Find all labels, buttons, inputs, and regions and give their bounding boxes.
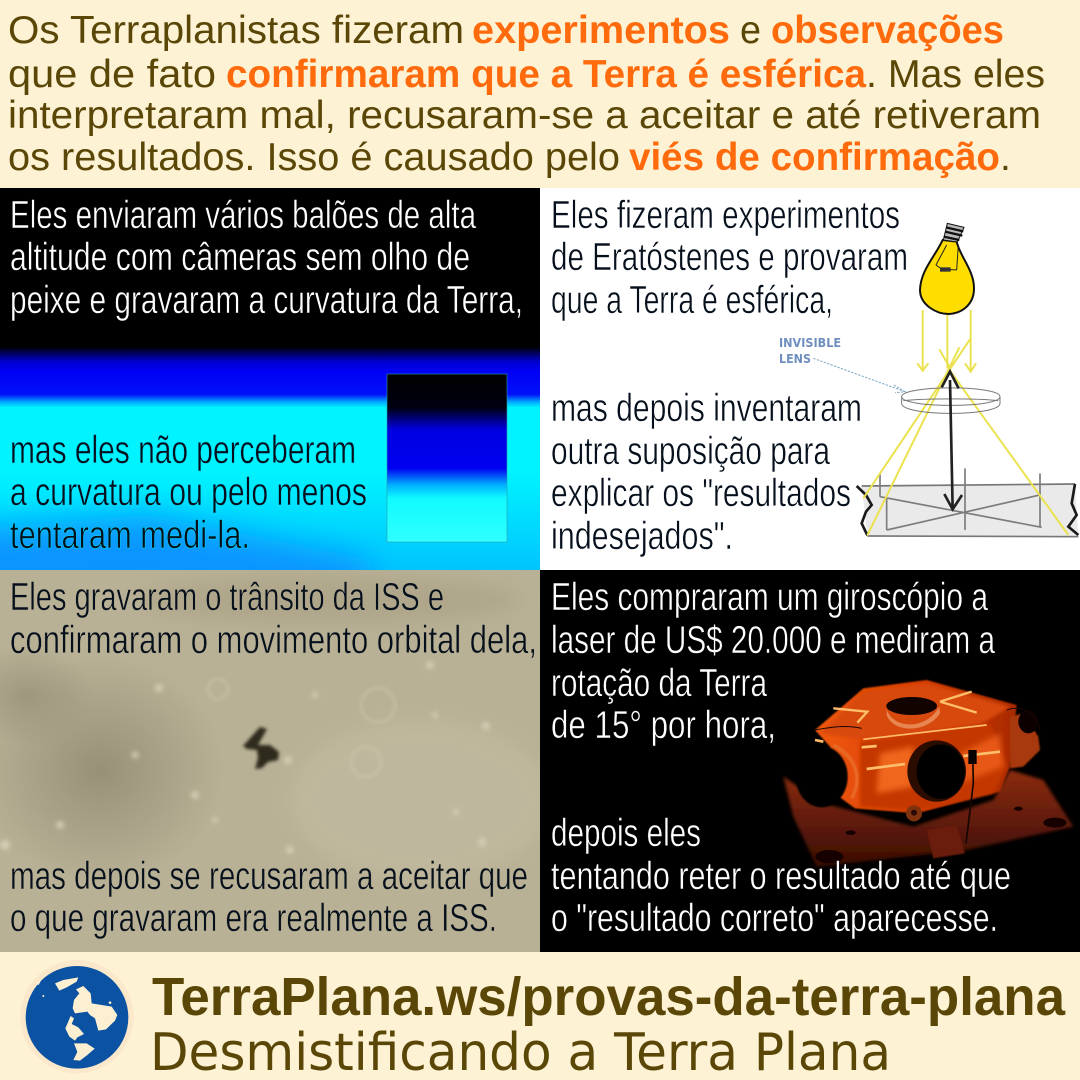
lens [902, 388, 1000, 413]
text: balloon claim: peixe e gravaram a curvatura da Terra, [10, 279, 523, 322]
heading: main statement: observações [771, 9, 1004, 52]
wires [966, 752, 973, 843]
black arrow [942, 372, 962, 509]
text: ISS rebuttal: mas depois se recusaram a aceitar que [10, 855, 528, 898]
text: Eratosthenes claim: de Eratóstenes e provaram [551, 236, 908, 279]
photo: ring laser gyroscope [783, 680, 1073, 867]
text: gyroscope claim [551, 576, 995, 747]
heading: main statement: os resultados. Isso é causado pelo [8, 136, 620, 179]
heading: main statement: e [740, 9, 761, 52]
text: Eratosthenes rebuttal: outra suposição para [551, 430, 830, 473]
text: balloon rebuttal: mas eles não perceberam [10, 429, 356, 472]
heading: main statement: . [1000, 136, 1011, 179]
icon: flat earth globe [20, 960, 134, 1073]
heading: main statement: . Mas eles [866, 53, 1045, 96]
base plate [783, 770, 1073, 867]
text: balloon claim: Eles enviaram vários balões de alta [10, 194, 476, 237]
text: balloon claim [10, 194, 523, 322]
heading: main statement: que de fato [8, 53, 216, 96]
panel: balloon curvature [0, 188, 540, 570]
ground plane [862, 484, 1078, 537]
illustration: bulb, invisible lens and ground [813, 223, 1078, 537]
text: Eratosthenes rebuttal [551, 387, 862, 558]
inset: zoomed horizon crop [387, 374, 507, 542]
text: balloon rebuttal [10, 429, 367, 557]
text: balloon rebuttal: a curvatura ou pelo menos [10, 471, 367, 514]
heading: main statement: interpretaram mal, recusaram-se a aceitar e até retiveram [8, 94, 1041, 137]
text: ISS rebuttal: o que gravaram era realmente a ISS. [10, 897, 497, 940]
text: ISS rebuttal [10, 855, 528, 940]
heading: main statement [8, 9, 1045, 179]
lens label leader [813, 358, 905, 393]
text: balloon claim: altitude com câmeras sem olho de [10, 236, 470, 279]
panel: laser gyroscope [540, 570, 1080, 952]
heading: main statement: confirmaram que a Terra é esférica [226, 53, 866, 96]
ports [1010, 713, 1040, 768]
text: ISS claim: confirmaram o movimento orbital dela, [10, 619, 537, 662]
text: gyroscope claim: de 15° por hora, [551, 704, 776, 747]
text: Eratosthenes rebuttal: indesejados". [551, 515, 733, 558]
text: ISS claim: Eles gravaram o trânsito da ISS e [10, 576, 444, 619]
text: Eratosthenes claim: que a Terra é esférica, [551, 279, 833, 322]
text: Eratosthenes claim [551, 194, 908, 322]
bulb [920, 240, 974, 314]
text: balloon rebuttal: tentaram medi-la. [10, 514, 250, 557]
text: gyroscope rebuttal: depois eles [551, 812, 701, 855]
panel: Eratosthenes experiment: LENS [779, 352, 811, 366]
text: Eratosthenes rebuttal: mas depois inventaram [551, 387, 862, 430]
icon: ISS silhouette [243, 727, 279, 769]
heading: main statement: Os Terraplanistas fizeram [8, 9, 464, 52]
heading: main statement: experimentos [472, 9, 730, 52]
panel: Eratosthenes experiment [540, 188, 1080, 570]
panel: ISS transit [0, 570, 550, 952]
gyroscope body [815, 680, 1017, 813]
text: Eratosthenes claim: Eles fizeram experimentos [551, 194, 900, 237]
text: Eratosthenes rebuttal: explicar os "resultados [551, 472, 851, 515]
footer band [0, 952, 1080, 1080]
text: gyroscope claim: rotação da Terra [551, 662, 767, 705]
label: invisible lens: INVISIBLE [779, 336, 841, 350]
photo: moon surface texture [0, 576, 550, 885]
footer: website url: TerraPlana.ws/provas-da-terra-plana [152, 967, 1066, 1027]
light rays [863, 310, 1068, 535]
text: ISS claim [10, 576, 537, 662]
text: gyroscope rebuttal [551, 812, 1011, 940]
laser beams [815, 692, 1000, 769]
heading: main statement: viés de confirmação [629, 136, 1000, 179]
